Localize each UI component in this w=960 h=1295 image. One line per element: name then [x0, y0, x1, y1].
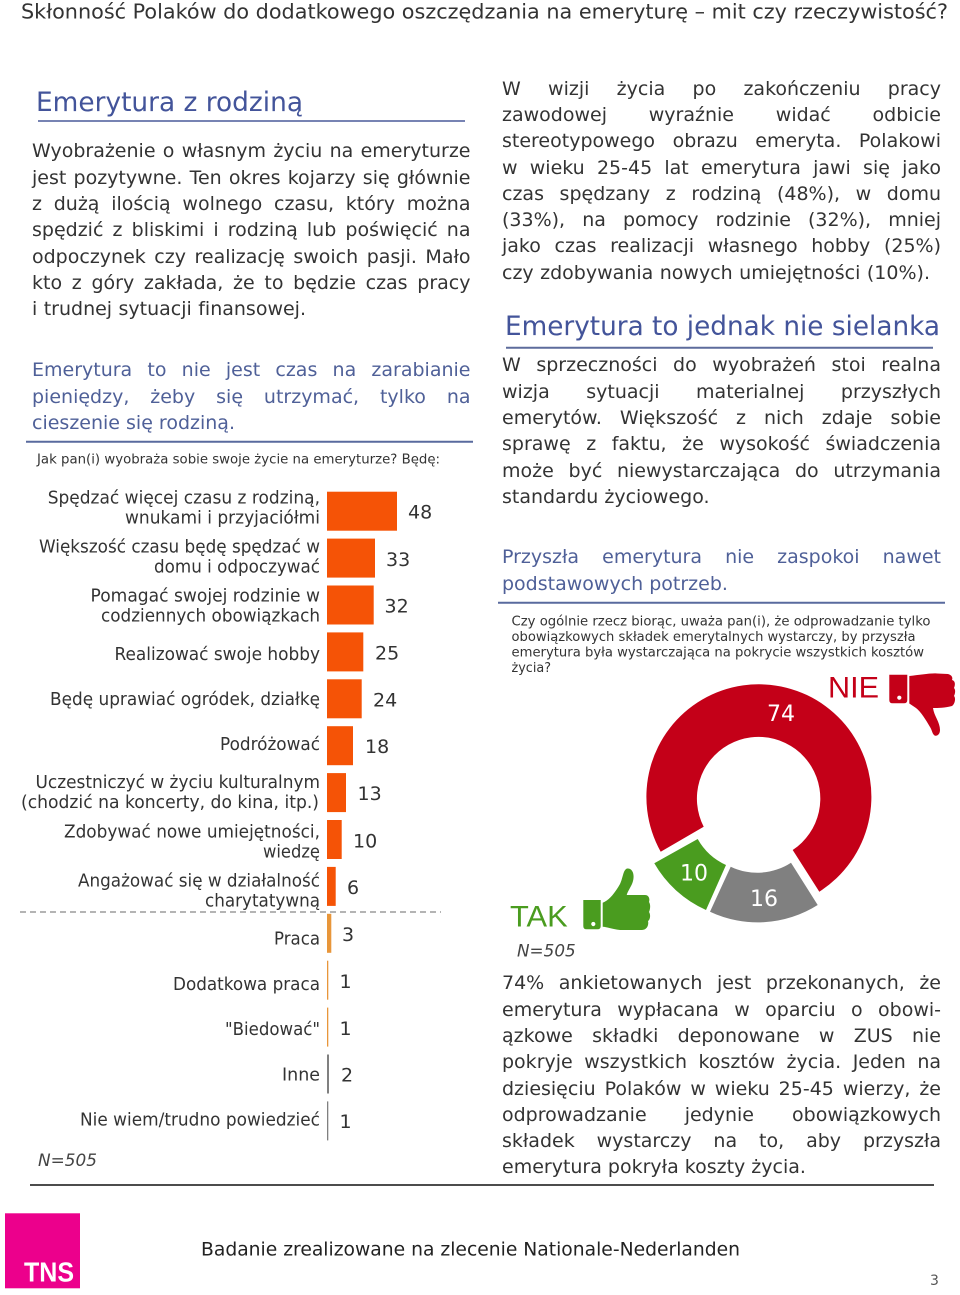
- bar: dodatkowa praca 1: Dodatkowa praca: [173, 974, 320, 995]
- text block: wyobrażenie o życiu na emeryturze: [32, 140, 470, 320]
- bar: pomoc rodzinie 32: 32: [384, 596, 409, 618]
- bar: podróże 18: Podróżować: [220, 734, 320, 755]
- text block: wizja życia po pracy: (33%), na pomocy rodzinie (32%), mniej: [502, 209, 941, 231]
- bar: biedować 1: 1: [340, 1018, 352, 1040]
- slice: nie wiem 16: [710, 863, 818, 922]
- bar: inne 2: [282, 1054, 353, 1094]
- bar: nie wiem 1: [80, 1101, 352, 1140]
- text block: wyniki 74%: 74% ankietowanych jest przekonanych, że: [502, 972, 941, 994]
- question: bar chart: Jak pan(i) wyobraża sobie swoje życie na emeryturze? Będę:: [36, 452, 440, 468]
- icon: thumb down: [889, 673, 955, 736]
- text block: sprzeczność wyobrażeń: emerytów. Większość z nich zdaje sobie: [502, 407, 941, 429]
- text block: sprzeczność wyobrażeń: może być niewystarczająca do utrzymania: [502, 460, 941, 482]
- bar: praca 3: Praca: [274, 928, 320, 949]
- bar: biedować 1: [225, 1008, 352, 1047]
- footer note: Badanie zrealizowane na zlecenie Nationale-Nederlanden: [201, 1238, 740, 1260]
- text block: wyniki 74%: ązkowe składki deponowane w ZUS nie: [502, 1025, 941, 1047]
- slice: NIE 74: [646, 684, 871, 892]
- sample size: donut chart: N=505: [517, 942, 576, 962]
- text block: wizja życia po pracy: czas spędzany z rodziną (48%), w domu: [502, 183, 941, 205]
- callout: emerytura to nie jest czas na zarabianie: pieniędzy, żeby się utrzymać, tylko na: [32, 386, 470, 408]
- logo: TNS: TNS: [24, 1257, 74, 1288]
- page number: 3: [930, 1273, 939, 1289]
- bar: podróże 18: [220, 726, 389, 765]
- bar: kultura 13: (chodzić na koncerty, do kina, itp.): [21, 792, 319, 813]
- text block: wyniki 74%: dziesięciu Polaków w wieku 25-45 wierzy, że: [502, 1078, 941, 1100]
- bar chart: retirement expectations: [20, 487, 441, 1140]
- text block: wyobrażenie o życiu na emeryturze: z dużą ilością wolnego czasu, który można: [32, 193, 470, 215]
- text block: wizja życia po pracy: W wizji życia po zakończeniu pracy: [502, 78, 941, 100]
- callout: przyszła emerytura nie zaspokoi potrzeb: podstawowych potrzeb.: [502, 573, 728, 595]
- text block: wizja życia po pracy: jako czas realizacji własnego hobby (25%): [502, 235, 941, 257]
- text block: wizja życia po pracy: w wieku 25-45 lat emerytura jawi się jako: [502, 157, 941, 179]
- bar: praca 3: [274, 914, 354, 953]
- text block: wyobrażenie o życiu na emeryturze: i trudnej sytuacji finansowej.: [32, 298, 306, 320]
- text block: sprzeczność wyobrażeń: sprawę z faktu, że wysokość świadczenia: [502, 433, 941, 455]
- bar: nie wiem 1: 1: [340, 1111, 352, 1133]
- value: 10: 10: [680, 862, 708, 886]
- bar: rodzina 48: 48: [408, 502, 432, 524]
- bar: charytatywna 6: charytatywną: [205, 891, 320, 912]
- bar: praca 3: 3: [342, 924, 354, 946]
- bar: dodatkowa praca 1: 1: [340, 971, 352, 993]
- callout: przyszła emerytura nie zaspokoi potrzeb: Przyszła emerytura nie zaspokoi nawet: [502, 546, 941, 568]
- bar: hobby 25: Realizować swoje hobby: [114, 644, 320, 665]
- text block: wizja życia po pracy: stereotypowego obrazu emeryta. Polakowi: [502, 130, 941, 152]
- bar: inne 2: Inne: [282, 1065, 320, 1086]
- donut chart: [646, 684, 871, 922]
- text block: wyobrażenie o życiu na emeryturze: spędzić z bliskimi i rodziną lub poświęcić na: [32, 219, 470, 241]
- text block: sprzeczność wyobrażeń: standardu życiowego.: [502, 486, 710, 508]
- bar: dodatkowa praca 1: [173, 961, 352, 1000]
- callout: emerytura to nie jest czas na zarabianie: Emerytura to nie jest czas na zarabianie: [32, 359, 470, 381]
- heading: Emerytura z rodziną: Emerytura z rodziną: [36, 87, 303, 118]
- bar: pomoc rodzinie 32: Pomagać swojej rodzinie w: [90, 586, 320, 607]
- question: donut chart: życia?: [512, 660, 551, 676]
- text block: sprzeczność wyobrażeń: [502, 354, 941, 508]
- bar: ogródek 24: [50, 679, 397, 718]
- bar: charytatywna 6: 6: [347, 877, 359, 899]
- text block: wyobrażenie o życiu na emeryturze: Wyobrażenie o własnym życiu na emeryturze: [32, 140, 470, 162]
- question: donut chart: emerytura była wystarczająca na pokrycie wszystkich kosztów: [512, 645, 924, 661]
- sample size: bar chart: N=505: [38, 1151, 97, 1171]
- text block: sprzeczność wyobrażeń: wizja sytuacji materialnej przyszłych: [502, 381, 941, 403]
- text block: wizja życia po pracy: [502, 78, 941, 284]
- text block: wyniki 74%: emerytura pokryła koszty życia.: [502, 1156, 806, 1178]
- heading: Emerytura to jednak nie sielanka: Emerytura to jednak nie sielanka: [505, 311, 940, 342]
- bar: kultura 13: [21, 772, 382, 813]
- bar: rodzina 48: Spędzać więcej czasu z rodziną,: [48, 487, 320, 508]
- bar: umiejętności 10: 10: [353, 831, 377, 853]
- text block: wyniki 74%: składek wystarczy na to, aby przyszła: [502, 1130, 941, 1152]
- text block: wyobrażenie o życiu na emeryturze: kto z góry zakłada, że to będzie czas pracy: [32, 272, 470, 294]
- title: Skłonność Polaków do dodatkowego oszczędzania na emeryturę – mit czy rzeczywistość?: [21, 0, 948, 24]
- question: donut chart: Czy ogólnie rzecz biorąc, uważa pan(i), że odprowadzanie tylko: [512, 613, 930, 629]
- bar: ogródek 24: 24: [373, 690, 397, 712]
- bar: nie wiem 1: Nie wiem/trudno powiedzieć: [80, 1110, 320, 1131]
- text block: wyniki 74%: [502, 972, 941, 1178]
- text block: wyobrażenie o życiu na emeryturze: odpoczynek czy realizację swoich pasji. Mało: [32, 246, 470, 268]
- callout: emerytura to nie jest czas na zarabianie: cieszenie się rodziną.: [32, 412, 235, 434]
- bar: dom 33: 33: [386, 549, 410, 571]
- callout: emerytura to nie jest czas na zarabianie: [32, 359, 470, 434]
- bar: dom 33: domu i odpoczywać: [154, 557, 320, 578]
- text block: wyniki 74%: pokryje wszystkich kosztów życia. Jeden na: [502, 1051, 941, 1073]
- text block: wyniki 74%: emerytura wypłacana w oparciu o obowi-: [502, 999, 941, 1021]
- bar: podróże 18: 18: [365, 736, 389, 758]
- bar: biedować 1: "Biedować": [225, 1019, 320, 1040]
- callout: przyszła emerytura nie zaspokoi potrzeb: [502, 546, 941, 595]
- text block: wizja życia po pracy: czy zdobywania nowych umiejętności (10%).: [502, 262, 930, 284]
- label: TAK: TAK: [510, 901, 568, 934]
- icon: thumb up: [583, 868, 650, 930]
- value: 74: 74: [767, 702, 795, 727]
- bar: rodzina 48: [48, 487, 432, 531]
- logo: TNS: [5, 1213, 80, 1288]
- bar: umiejętności 10: [64, 820, 377, 863]
- slice: TAK 10: [654, 839, 726, 910]
- label: NIE: NIE: [828, 671, 879, 704]
- bar: umiejętności 10: Zdobywać nowe umiejętności,: [64, 822, 320, 843]
- bar: pomoc rodzinie 32: codziennych obowiązkach: [101, 606, 320, 627]
- text block: sprzeczność wyobrażeń: W sprzeczności do wyobrażeń stoi realna: [502, 354, 941, 376]
- text block: wyobrażenie o życiu na emeryturze: jest pozytywne. Ten okres kojarzy się głównie: [32, 167, 470, 189]
- bar: kultura 13: 13: [358, 783, 382, 805]
- bar: inne 2: 2: [341, 1065, 353, 1087]
- bar: hobby 25: 25: [375, 642, 399, 664]
- bar: dom 33: Większość czasu będę spędzać w: [39, 536, 320, 557]
- bar: umiejętności 10: wiedzę: [263, 842, 320, 863]
- text block: wyniki 74%: odprowadzanie jedynie obowiązkowych: [502, 1104, 941, 1126]
- value: 16: 16: [750, 887, 778, 912]
- question: donut chart: [512, 613, 930, 676]
- bar: ogródek 24: Będę uprawiać ogródek, działkę: [50, 689, 320, 710]
- text block: wizja życia po pracy: zawodowej wyraźnie widać odbicie: [502, 104, 941, 126]
- bar: hobby 25: [114, 632, 399, 671]
- bar: charytatywna 6: [78, 867, 359, 912]
- question: donut chart: obowiązkowych składek emerytalnych wystarczy, by przyszła: [512, 629, 916, 645]
- bar: charytatywna 6: Angażować się w działalność: [78, 871, 320, 892]
- bar: dom 33: [39, 536, 410, 578]
- bar: kultura 13: Uczestniczyć w życiu kulturalnym: [36, 772, 320, 793]
- bar: rodzina 48: wnukami i przyjaciółmi: [125, 507, 320, 528]
- bar: pomoc rodzinie 32: [90, 586, 409, 627]
